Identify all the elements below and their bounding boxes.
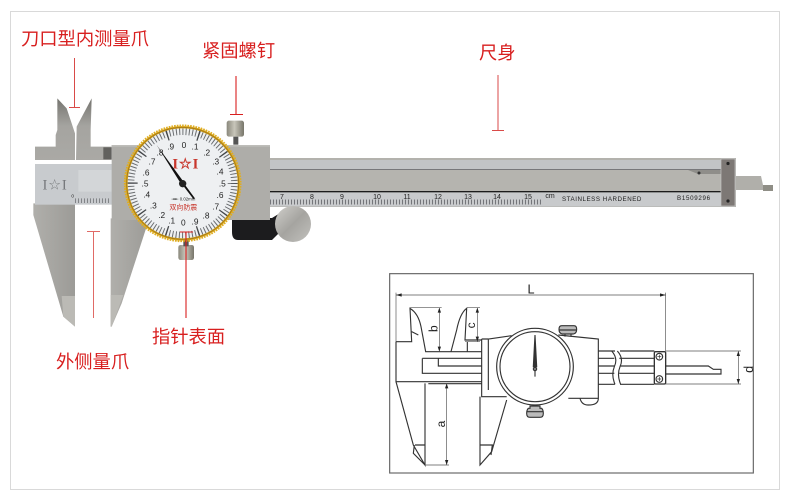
label: knife jaws: 刀口型内测量爪 bbox=[21, 28, 149, 49]
dial outline bbox=[497, 328, 573, 405]
ruler numbers: 7 bbox=[280, 194, 284, 201]
beam of the caliper bbox=[268, 158, 773, 207]
dimension b bbox=[410, 308, 442, 352]
dial numbers: 0 bbox=[182, 140, 187, 150]
dial numbers: .9 bbox=[192, 217, 199, 227]
label: outer jaws: 外侧量爪 bbox=[56, 351, 129, 372]
dial numbers: .9 bbox=[167, 142, 175, 152]
logo on band: I☆I bbox=[43, 177, 67, 193]
ruler numbers: 12 bbox=[434, 194, 442, 201]
dial numbers: .5 bbox=[219, 178, 226, 188]
engraved text: STAINLESS HARDENED bbox=[562, 196, 642, 203]
ruler numbers bbox=[280, 193, 555, 201]
resolution text: ⇥⇤ 0.02mm bbox=[171, 196, 196, 201]
thumb wheel bbox=[232, 206, 311, 242]
sliding knife bbox=[76, 98, 112, 160]
dial numbers bbox=[142, 140, 226, 228]
pointer line: beam bbox=[492, 75, 504, 130]
label: lock screw: 紧固螺钉 bbox=[202, 40, 275, 61]
fixed jaw and knife bbox=[35, 98, 75, 160]
dimension L: L bbox=[527, 283, 535, 297]
dial numbers: .2 bbox=[158, 210, 166, 220]
dial face bbox=[128, 128, 238, 238]
minor ticks bbox=[131, 132, 234, 235]
bottom screw outline bbox=[527, 406, 543, 417]
ruler numbers: 13 bbox=[464, 194, 472, 201]
ruler numbers: 11 bbox=[403, 194, 411, 201]
dimension c: c bbox=[464, 322, 478, 328]
dial numbers: .3 bbox=[212, 157, 220, 167]
dimension drawing panel bbox=[390, 274, 756, 473]
pointer line: dial bbox=[180, 232, 193, 318]
dial numbers: .6 bbox=[143, 167, 150, 177]
dial numbers: .6 bbox=[217, 190, 224, 200]
zero mark: 0 bbox=[71, 193, 74, 198]
dimension c bbox=[464, 308, 480, 342]
dial numbers: .8 bbox=[157, 147, 164, 157]
dial numbers: .8 bbox=[203, 211, 210, 221]
top screw outline bbox=[559, 326, 577, 337]
ruler numbers: 10 bbox=[373, 194, 381, 201]
label: beam: 尺身 bbox=[479, 42, 516, 63]
dial logo: I☆I bbox=[172, 157, 199, 173]
depth rod outline bbox=[666, 366, 721, 374]
dimension d: d bbox=[742, 366, 756, 373]
fixed jaw outline bbox=[396, 308, 482, 384]
dial bbox=[125, 126, 240, 241]
depth rod bbox=[736, 176, 763, 190]
dial numbers: .7 bbox=[212, 202, 220, 212]
ruler numbers: cm bbox=[545, 193, 555, 200]
label: dial face: 指针表面 bbox=[152, 326, 225, 347]
fixed lower jaw bbox=[33, 203, 75, 327]
pointer line: knife jaw bbox=[69, 58, 80, 108]
dial numbers: .4 bbox=[217, 167, 224, 177]
slider body bbox=[482, 335, 598, 405]
ruler numbers: 15 bbox=[524, 194, 532, 201]
gold bezel bbox=[125, 126, 240, 241]
dimension b: b bbox=[427, 325, 441, 332]
pointer line: lock screw bbox=[230, 76, 243, 114]
ruler ticks bbox=[270, 200, 543, 204]
dimension L bbox=[396, 283, 666, 351]
caliper photo bbox=[33, 98, 270, 327]
ruler numbers: 8 bbox=[310, 194, 314, 201]
needle hub bbox=[179, 180, 186, 187]
needle bbox=[157, 145, 195, 199]
top screw bbox=[227, 121, 244, 145]
ruler numbers: 14 bbox=[493, 194, 501, 201]
slider block bbox=[112, 145, 270, 220]
beam outline bbox=[598, 351, 654, 384]
end clip outline bbox=[654, 352, 666, 384]
dial numbers: .2 bbox=[203, 148, 211, 158]
ruler numbers: 9 bbox=[340, 194, 344, 201]
depth rod tip bbox=[763, 185, 773, 191]
serial number: B1509296 bbox=[677, 195, 711, 202]
scale band bbox=[35, 164, 112, 205]
dial numbers: .3 bbox=[150, 201, 157, 211]
dial numbers: 0 bbox=[181, 218, 186, 228]
panel border bbox=[390, 274, 753, 473]
pointer line: outer jaws bbox=[87, 232, 100, 318]
sliding lower jaw bbox=[111, 218, 149, 327]
dial numbers: .5 bbox=[142, 178, 149, 188]
bottom screw bbox=[178, 238, 194, 260]
dial caption: 双向防震 bbox=[169, 202, 197, 211]
dimension d bbox=[666, 351, 756, 384]
lower jaws bbox=[396, 382, 507, 465]
dial numbers: .1 bbox=[168, 216, 176, 226]
dial numbers: .4 bbox=[143, 189, 151, 199]
dimension a bbox=[425, 383, 449, 465]
dial numbers: .7 bbox=[149, 156, 156, 166]
dimension a: a bbox=[434, 420, 448, 427]
dial numbers: .1 bbox=[192, 142, 199, 152]
end clip bbox=[688, 159, 735, 206]
major ticks bbox=[133, 133, 233, 233]
